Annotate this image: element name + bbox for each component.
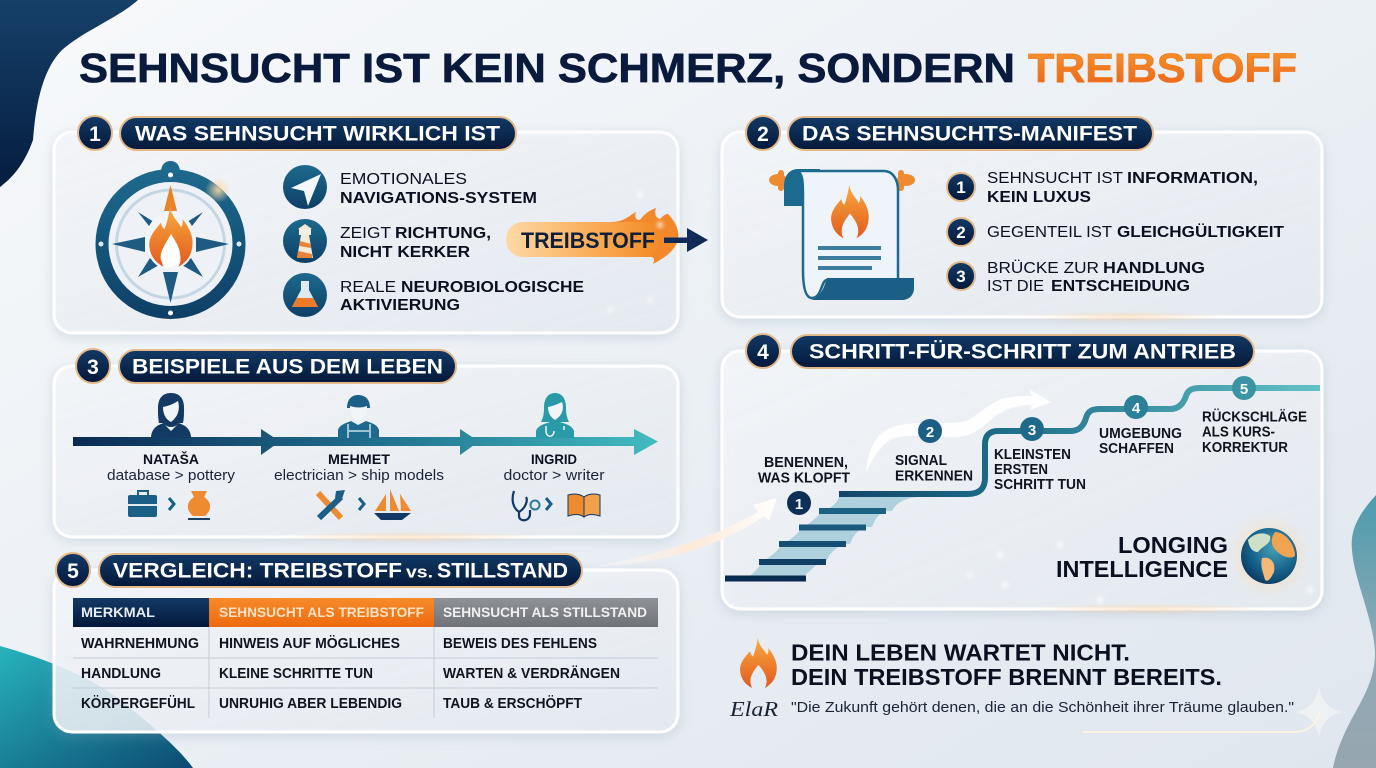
text: Nataša xyxy=(107,450,236,484)
list item: lighthouse: RICHTUNG, xyxy=(395,225,491,242)
text: Nataša: database > pottery xyxy=(107,468,236,484)
panel 3: Beispiele aus dem Leben xyxy=(54,349,678,537)
manifest item 3: IST DIE xyxy=(987,278,1044,295)
table header xyxy=(73,598,658,627)
step 4: 4 xyxy=(1132,400,1141,417)
panel 5: Vergleich Treibstoff vs. Stillstand xyxy=(54,553,678,732)
step 4 xyxy=(1099,395,1182,457)
timeline arrow xyxy=(73,429,658,455)
white arrow from table to staircase xyxy=(592,498,777,567)
manifest item 3: HANDLUNG xyxy=(1103,260,1205,277)
manifest item 3: BRÜCKE ZUR xyxy=(987,259,1099,277)
step 5 xyxy=(1202,376,1307,456)
manifest item 1: KEIN LUXUS xyxy=(987,189,1091,206)
brand text: Longing Intelligence xyxy=(1056,532,1228,582)
manifest item 3: 3 xyxy=(956,267,966,286)
manifest item 3: ENTSCHEIDUNG xyxy=(1051,278,1190,295)
step 3: ERSTEN xyxy=(994,462,1048,478)
panel 4 heading: 4 xyxy=(757,341,769,364)
footer call to action xyxy=(729,638,1294,721)
table row: Wahrnehmung: HINWEIS AUF MÖGLICHES xyxy=(219,635,400,652)
manifest item 2: GLEICHGÜLTIGKEIT xyxy=(1117,222,1284,241)
quote: "Die Zukunft gehört denen, die an die Schönheit ihrer Träume glauben." xyxy=(791,700,1294,716)
step 3: SCHRITT TUN xyxy=(994,477,1086,493)
step 1: 1 xyxy=(795,496,803,513)
text: Ingrid xyxy=(504,451,605,484)
step 1: BENENNEN, xyxy=(764,455,848,471)
step 4: UMGEBUNG xyxy=(1099,426,1182,442)
text: Mehmet xyxy=(274,451,444,484)
panel 5 heading: 5 xyxy=(67,560,79,583)
step 2: 2 xyxy=(926,424,934,441)
panel 4: Schritt-für-Schritt zum Antrieb xyxy=(722,334,1322,609)
manifest item 3 xyxy=(947,259,1205,295)
list item: lighthouse xyxy=(283,219,491,263)
panel 2 heading: 2 xyxy=(757,123,769,146)
table row: Handlung: WARTEN & VERDRÄNGEN xyxy=(443,665,620,682)
person: Ingrid xyxy=(536,393,574,438)
background blob: top left xyxy=(0,0,138,187)
manifest item 1: 1 xyxy=(956,178,966,197)
text: Nataša: NATAŠA xyxy=(143,450,199,467)
panel 3 heading: 3 xyxy=(87,356,99,379)
table row: Körpergefühl xyxy=(81,695,582,712)
panel 1 heading: 1 xyxy=(89,123,101,146)
list item: navigation xyxy=(283,165,537,209)
text: Mehmet: MEHMET xyxy=(328,451,390,467)
panel 2: Das Sehnsuchts-Manifest xyxy=(722,116,1322,317)
comparison table xyxy=(73,598,658,718)
table row: Körpergefühl: TAUB & ERSCHÖPFT xyxy=(443,695,582,712)
decorative particles xyxy=(608,192,1313,603)
table row: Handlung xyxy=(81,665,620,682)
step 1 xyxy=(758,455,850,515)
icon: scroll with flame xyxy=(769,169,915,300)
icons: stethoscope to book xyxy=(513,491,600,520)
sparkle xyxy=(1083,687,1343,737)
brand text: Longing Intelligence: LONGING xyxy=(1118,532,1228,558)
manifest item 2: GEGENTEIL IST xyxy=(987,224,1112,241)
staircase xyxy=(725,497,920,582)
closing headline xyxy=(791,640,1222,690)
icon: globe xyxy=(1227,514,1311,598)
panel 3 heading xyxy=(76,349,456,383)
text: Ingrid: INGRID xyxy=(531,451,577,467)
signature: ElaR xyxy=(729,697,778,721)
panel 4 heading xyxy=(746,334,1254,368)
list item: lighthouse: ZEIGT xyxy=(340,225,391,242)
list item: flask: AKTIVIERUNG xyxy=(340,297,460,314)
list item: flask: REALE xyxy=(340,279,396,296)
person: Nataša xyxy=(151,393,191,438)
panel 1: Was Sehnsucht wirklich ist xyxy=(54,116,678,333)
treibstoff flame badge with arrow: TREIBSTOFF xyxy=(521,228,655,253)
manifest item 1: INFORMATION, xyxy=(1127,170,1258,187)
table row: Handlung: KLEINE SCHRITTE TUN xyxy=(219,666,373,682)
panel 2 heading xyxy=(746,116,1153,150)
manifest item 1 xyxy=(947,170,1258,206)
closing headline: DEIN TREIBSTOFF BRENNT BEREITS. xyxy=(791,664,1222,690)
table row: Wahrnehmung: BEWEIS DES FEHLENS xyxy=(443,636,597,652)
icon: compass with flame xyxy=(96,161,246,319)
panel 5 heading: VERGLEICH: TREIBSTOFF xyxy=(113,560,402,582)
icons: briefcase to vase xyxy=(128,491,210,520)
panel 5 heading xyxy=(56,553,582,587)
table header: SEHNSUCHT ALS STILLSTAND xyxy=(443,604,647,620)
step 3: KLEINSTEN xyxy=(994,447,1071,463)
table row: Körpergefühl: UNRUHIG ABER LEBENDIG xyxy=(219,696,402,712)
step 1: WAS KLOPFT xyxy=(758,470,850,486)
step 3 xyxy=(994,417,1086,493)
panel 5 heading: STILLSTAND xyxy=(437,560,568,582)
panel 2 heading: DAS SEHNSUCHTS-MANIFEST xyxy=(802,122,1137,146)
icons: tools to ship xyxy=(318,489,411,520)
person: Mehmet xyxy=(338,395,379,438)
title: SEHNSUCHT IST KEIN SCHMERZ, SONDERN xyxy=(79,45,1015,91)
table row: Wahrnehmung xyxy=(81,635,597,652)
table row: Körpergefühl: KÖRPERGEFÜHL xyxy=(81,695,195,712)
panel 4 heading: SCHRITT-FÜR-SCHRITT ZUM ANTRIEB xyxy=(809,340,1236,364)
step 3: 3 xyxy=(1028,422,1036,439)
list item: navigation: NAVIGATIONS-SYSTEM xyxy=(340,190,537,207)
panel 5 heading: vs. xyxy=(406,562,433,582)
step 2 xyxy=(895,419,973,484)
table row: Handlung: HANDLUNG xyxy=(81,666,161,682)
list item: flask xyxy=(283,273,584,317)
list item: flask: NEUROBIOLOGISCHE xyxy=(401,279,584,296)
soft glow accents on panel edges xyxy=(280,311,1270,615)
manifest item 2 xyxy=(947,218,1284,246)
text: Mehmet: electrician > ship models xyxy=(274,468,444,484)
panel 1 heading: WAS SEHNSUCHT WIRKLICH IST xyxy=(135,122,500,146)
title: TREIBSTOFF xyxy=(1028,45,1297,91)
table header: MERKMAL xyxy=(81,604,155,620)
background blob: bottom right xyxy=(1333,495,1376,768)
step 5: 5 xyxy=(1240,381,1248,398)
treibstoff flame badge with arrow xyxy=(506,208,708,264)
step 4: SCHAFFEN xyxy=(1099,441,1174,457)
step 5: RÜCKSCHLÄGE xyxy=(1202,408,1307,426)
manifest item 1: SEHNSUCHT IST xyxy=(987,170,1123,187)
background blob: bottom left xyxy=(0,646,193,768)
step 5: KORREKTUR xyxy=(1202,440,1288,456)
progress path xyxy=(839,388,1320,494)
closing headline: DEIN LEBEN WARTET NICHT. xyxy=(791,640,1130,666)
step 5: ALS KURS- xyxy=(1202,424,1275,440)
panel 1 heading xyxy=(78,116,516,150)
brand text: Longing Intelligence: INTELLIGENCE xyxy=(1056,556,1228,582)
table row: Wahrnehmung: WAHRNEHMUNG xyxy=(81,636,199,652)
list item: navigation: EMOTIONALES xyxy=(340,171,467,188)
panel 3 heading: BEISPIELE AUS DEM LEBEN xyxy=(132,356,443,378)
step 2: SIGNAL xyxy=(895,453,947,469)
white ribbon arrow xyxy=(866,389,1051,473)
manifest item 2: 2 xyxy=(956,223,966,242)
table header: SEHNSUCHT ALS TREIBSTOFF xyxy=(219,604,424,620)
step 2: ERKENNEN xyxy=(895,468,973,484)
text: Ingrid: doctor > writer xyxy=(504,468,605,484)
list item: lighthouse: NICHT KERKER xyxy=(340,244,470,261)
icon: flame xyxy=(740,638,777,688)
